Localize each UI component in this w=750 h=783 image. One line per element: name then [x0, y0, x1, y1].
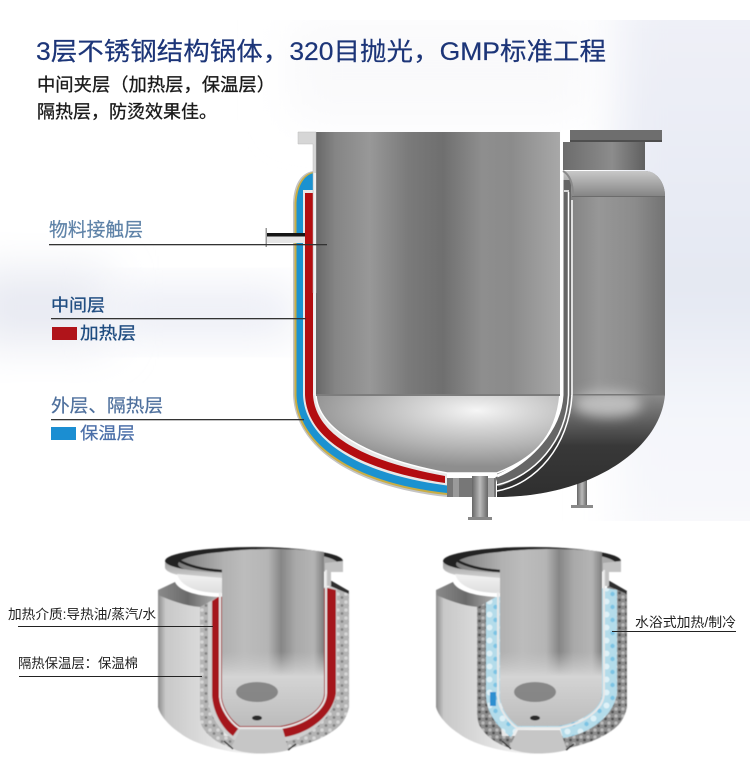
- right top dark band: [330, 580, 349, 594]
- red heating layer: [305, 193, 445, 483]
- blue insulation layer: [296, 173, 447, 493]
- right wall layer stripes: [497, 171, 573, 491]
- left callout: heating medium: 加热介质:导热油/蒸汽/水: [8, 607, 156, 622]
- inner vessel edge: [220, 570, 326, 728]
- inner bottom shading: [236, 682, 278, 702]
- left small vessel: oil or steam heating: [158, 547, 350, 754]
- white plate: [455, 574, 500, 593]
- callout: material contact layer: 物料接触层: [49, 219, 143, 241]
- deep blue patch: [490, 692, 496, 706]
- outer shell: [436, 590, 628, 754]
- insulation wool: [477, 584, 627, 752]
- front lip: [443, 562, 500, 580]
- shoulder cut: [436, 582, 496, 607]
- inner vessel: [222, 549, 324, 726]
- dark edge of lip: [178, 560, 222, 571]
- inner vessel wall: [316, 132, 560, 395]
- inner vessel bowl: [316, 395, 560, 473]
- left callout: insulation: 隔热保温层：保温棉: [18, 656, 138, 671]
- red heating medium: [212, 588, 336, 737]
- rim back and crescent: [165, 547, 343, 586]
- intro text: 中间夹层（加热层，保温层）: [37, 75, 275, 95]
- background panel: [0, 20, 750, 502]
- inner bottom shading: [514, 682, 556, 702]
- outer shell: [158, 590, 350, 754]
- inner vessel: [500, 549, 602, 726]
- main vessel cross-section: [266, 130, 665, 520]
- drain hole: [252, 716, 262, 720]
- shoulder cut: [158, 582, 218, 607]
- light inner liner: [208, 586, 337, 741]
- bottom drain: [447, 476, 496, 520]
- callout: outer layer: 外层、隔热层: [51, 396, 163, 416]
- intro text: 隔热层，防烫效果佳。: [37, 102, 217, 122]
- bottom opening: [231, 730, 289, 754]
- drain hole: [530, 716, 540, 720]
- insulation wool: [200, 584, 349, 752]
- right top dark band: [608, 580, 627, 594]
- left rim flange: [298, 132, 316, 293]
- white plate: [177, 574, 222, 593]
- bottom opening: [509, 730, 567, 754]
- dark edge of lip: [456, 560, 500, 571]
- outer jacket body, right: [497, 171, 665, 497]
- wall seam: [316, 394, 560, 396]
- rim back and crescent: [443, 547, 621, 586]
- white separator: [303, 190, 447, 486]
- right callout: water bath: [612, 615, 736, 632]
- water layer: [486, 588, 617, 738]
- callout: middle layer: 加热层: [80, 324, 136, 343]
- inner vessel edge: [498, 570, 604, 728]
- neck and flange, right: [561, 130, 662, 170]
- side pipe: [266, 228, 305, 247]
- callout: outer layer: 保温层: [80, 424, 135, 443]
- yellow trim: [294, 172, 447, 495]
- right callout: water bath: 水浴式加热/制冷: [635, 615, 736, 630]
- callout: middle layer: 中间层: [51, 296, 105, 315]
- front lip: [165, 562, 222, 580]
- bottom dark streaks: [502, 741, 574, 750]
- intro text: [37, 75, 275, 122]
- white wall edge: [314, 173, 316, 395]
- callout: outer layer: [51, 396, 304, 443]
- callout: middle layer: [51, 296, 306, 343]
- title: 3层不锈钢结构锅体，320目抛光，GMP标准工程: [36, 38, 606, 66]
- outer wall, left: [293, 171, 447, 497]
- leg: [571, 478, 593, 508]
- right small vessel: water bath: [436, 547, 628, 754]
- bottom dark streaks: [224, 741, 296, 750]
